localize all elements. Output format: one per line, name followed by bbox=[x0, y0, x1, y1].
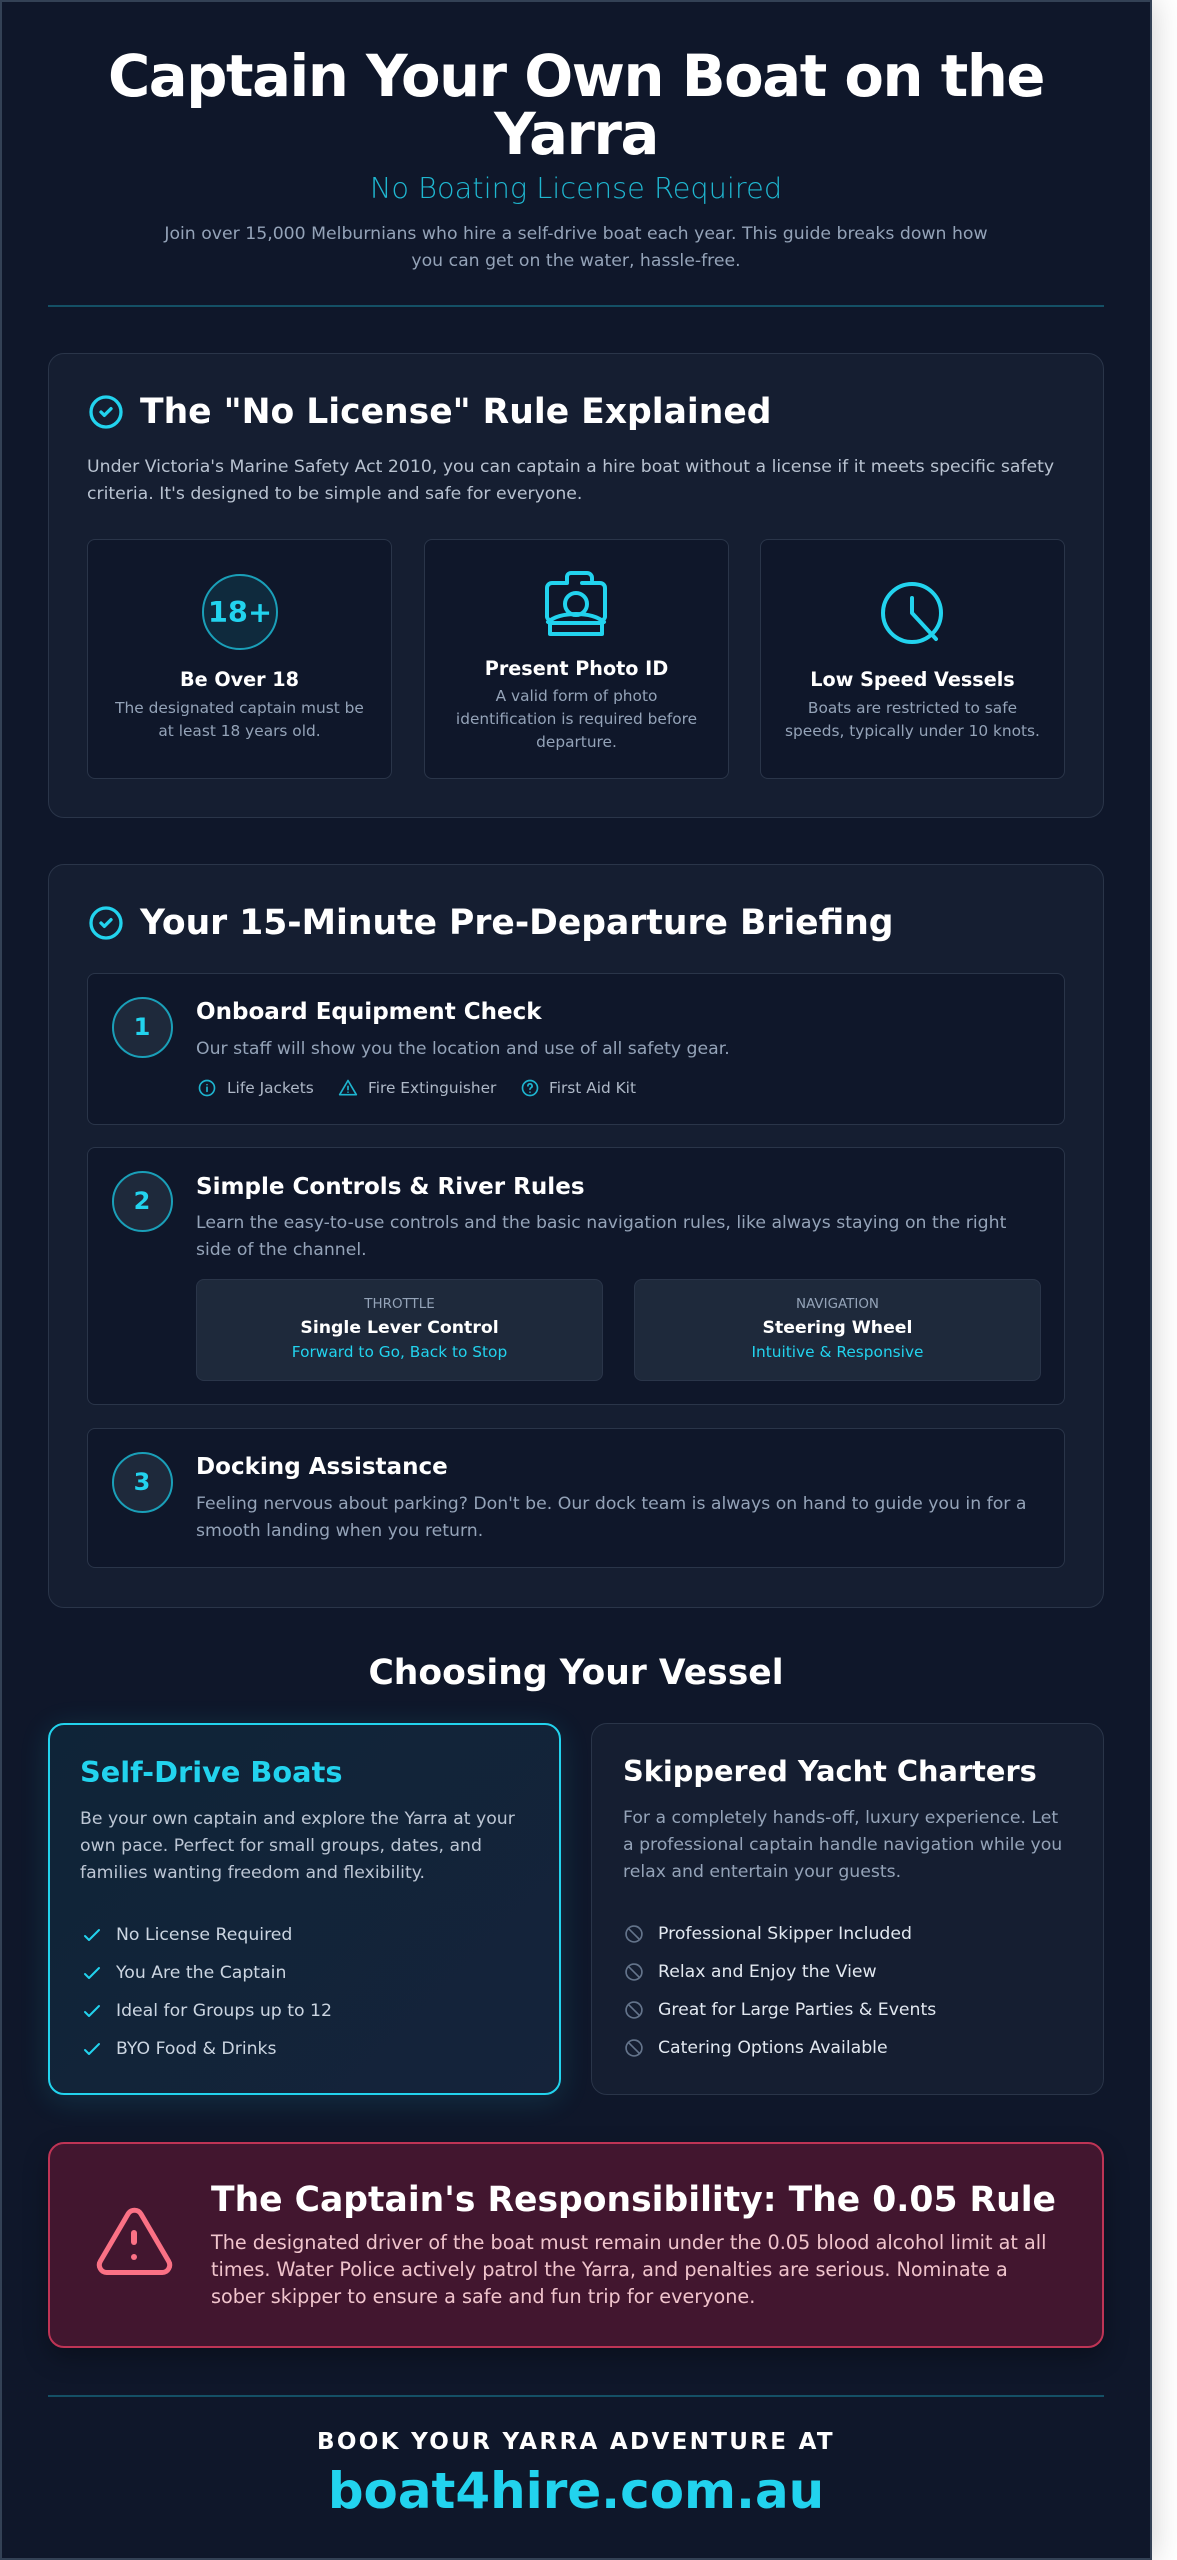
intro text: Join over 15,000 Melburnians who hire a self-drive boat each year. This guide breaks down how bbox=[164, 224, 988, 244]
number badge bbox=[112, 1171, 172, 1232]
description bbox=[87, 457, 1054, 504]
icon: question bbox=[522, 1080, 538, 1096]
title: Skippered Yacht Charters bbox=[623, 1754, 1037, 1788]
icon: photo ID bbox=[545, 571, 607, 636]
item: Professional Skipper Included bbox=[658, 1924, 912, 1944]
control: navigation bbox=[634, 1279, 1041, 1381]
heading: The "No License" Rule Explained bbox=[140, 392, 772, 432]
panel: self-drive boats bbox=[48, 1723, 561, 2095]
callout text: sober skipper to ensure a safe and fun trip for everyone. bbox=[211, 2285, 755, 2308]
step text: Our staff will show you the location and use of all safety gear. bbox=[196, 1039, 730, 1059]
value: Single Lever Control bbox=[300, 1318, 499, 1338]
step 1 bbox=[87, 973, 1065, 1125]
description: Be your own captain and explore the Yarra at your bbox=[80, 1809, 515, 1829]
step text: side of the channel. bbox=[196, 1240, 367, 1260]
item: Ideal for Groups up to 12 bbox=[116, 2001, 332, 2021]
callout: 0.05 rule bbox=[48, 2142, 1104, 2348]
card text: The designated captain must be bbox=[115, 699, 364, 717]
description: families wanting freedom and flexibility. bbox=[80, 1863, 425, 1883]
card title: Be Over 18 bbox=[180, 668, 299, 691]
item: BYO Food & Drinks bbox=[116, 2039, 277, 2059]
card text: at least 18 years old. bbox=[158, 722, 321, 740]
number badge: 2 bbox=[134, 1187, 150, 1215]
card text: speeds, typically under 10 knots. bbox=[785, 722, 1040, 740]
icon: 18+ badge bbox=[202, 574, 278, 650]
icon: warning triangle bbox=[96, 2208, 172, 2275]
step text bbox=[196, 1213, 1006, 1260]
card text bbox=[115, 699, 364, 740]
label: THROTTLE bbox=[364, 1297, 435, 1312]
step 2 bbox=[87, 1147, 1065, 1405]
number badge: 1 bbox=[134, 1013, 150, 1041]
step text bbox=[196, 1494, 1026, 1541]
description: a professional captain handle navigation while you bbox=[623, 1835, 1062, 1855]
card title: Present Photo ID bbox=[485, 657, 668, 680]
step text: Learn the easy-to-use controls and the basic navigation rules, like always staying on the right bbox=[196, 1213, 1006, 1233]
description: For a completely hands-off, luxury experience. Let bbox=[623, 1808, 1058, 1828]
card text bbox=[785, 699, 1040, 740]
icon: check circle bbox=[89, 906, 123, 940]
website: boat4hire.com.au bbox=[328, 2462, 824, 2520]
icon: 18+ badge: 18+ bbox=[208, 595, 272, 629]
footer bbox=[317, 2429, 835, 2520]
callout text: times. Water Police actively patrol the Yarra, and penalties are serious. Nominate a bbox=[211, 2258, 1008, 2281]
title bbox=[108, 43, 1044, 168]
description: own pace. Perfect for small groups, dates, and bbox=[80, 1836, 482, 1856]
card: low speed bbox=[760, 539, 1065, 779]
icon: check circle bbox=[89, 395, 123, 429]
intro text bbox=[164, 224, 988, 271]
note: Forward to Go, Back to Stop bbox=[292, 1343, 507, 1361]
intro text: you can get on the water, hassle-free. bbox=[411, 251, 741, 271]
icon: info bbox=[198, 1080, 216, 1096]
step text: smooth landing when you return. bbox=[196, 1521, 483, 1541]
step text: Feeling nervous about parking? Don't be. Our dock team is always on hand to guide you in for a bbox=[196, 1494, 1026, 1514]
description bbox=[623, 1808, 1062, 1882]
number badge bbox=[112, 997, 172, 1058]
note: Intuitive & Responsive bbox=[752, 1343, 923, 1361]
feature list bbox=[625, 1924, 936, 2058]
title: Captain Your Own Boat on the bbox=[108, 43, 1044, 110]
number badge: 3 bbox=[134, 1468, 150, 1496]
item: Great for Large Parties & Events bbox=[658, 2000, 936, 2020]
step title: Simple Controls & River Rules bbox=[196, 1174, 585, 1200]
description bbox=[80, 1809, 515, 1883]
control: throttle bbox=[196, 1279, 603, 1381]
callout title: The Captain's Responsibility: The 0.05 Rule bbox=[211, 2180, 1056, 2220]
description: Under Victoria's Marine Safety Act 2010, you can captain a hire boat without a license if it meets specific safety bbox=[87, 457, 1054, 477]
title: Self-Drive Boats bbox=[80, 1755, 342, 1789]
value: Steering Wheel bbox=[763, 1318, 912, 1338]
card text: A valid form of photo bbox=[496, 687, 657, 705]
panel: skippered yacht charters bbox=[591, 1723, 1104, 2095]
icon: clock bbox=[881, 582, 943, 644]
subtitle: No Boating License Required bbox=[370, 171, 782, 205]
feature list bbox=[84, 1925, 332, 2059]
label: Life Jackets bbox=[227, 1079, 314, 1097]
label: First Aid Kit bbox=[549, 1079, 636, 1097]
call to action: BOOK YOUR YARRA ADVENTURE AT bbox=[317, 2429, 835, 2455]
item: You Are the Captain bbox=[116, 1963, 286, 1983]
icon: warning bbox=[338, 1080, 358, 1096]
item: No License Required bbox=[116, 1925, 292, 1945]
callout text: The designated driver of the boat must remain under the 0.05 blood alcohol limit at all bbox=[211, 2231, 1046, 2254]
card title: Low Speed Vessels bbox=[810, 668, 1015, 691]
panel: pre-departure briefing bbox=[48, 864, 1104, 1608]
step 3 bbox=[87, 1428, 1065, 1568]
title: Yarra bbox=[494, 101, 658, 168]
label: NAVIGATION bbox=[796, 1297, 879, 1312]
card text: identification is required before bbox=[456, 710, 697, 728]
label: Fire Extinguisher bbox=[368, 1079, 496, 1097]
number badge bbox=[112, 1452, 172, 1513]
panel: no license rule bbox=[48, 353, 1104, 818]
step title: Docking Assistance bbox=[196, 1454, 448, 1480]
card text: Boats are restricted to safe bbox=[808, 699, 1017, 717]
card: over 18 bbox=[87, 539, 392, 779]
card: photo ID bbox=[424, 539, 729, 779]
equipment list bbox=[198, 1079, 636, 1097]
description: relax and entertain your guests. bbox=[623, 1862, 901, 1882]
step title: Onboard Equipment Check bbox=[196, 999, 542, 1025]
section heading: choosing your vessel: Choosing Your Vessel bbox=[368, 1653, 784, 1693]
callout text bbox=[210, 2231, 1046, 2308]
description: criteria. It's designed to be simple and safe for everyone. bbox=[87, 484, 582, 504]
card text bbox=[456, 687, 697, 751]
item: Catering Options Available bbox=[658, 2038, 888, 2058]
header bbox=[108, 43, 1044, 271]
card text: departure. bbox=[536, 733, 617, 751]
heading: Your 15-Minute Pre-Departure Briefing bbox=[140, 903, 894, 943]
item: Relax and Enjoy the View bbox=[658, 1962, 877, 1982]
